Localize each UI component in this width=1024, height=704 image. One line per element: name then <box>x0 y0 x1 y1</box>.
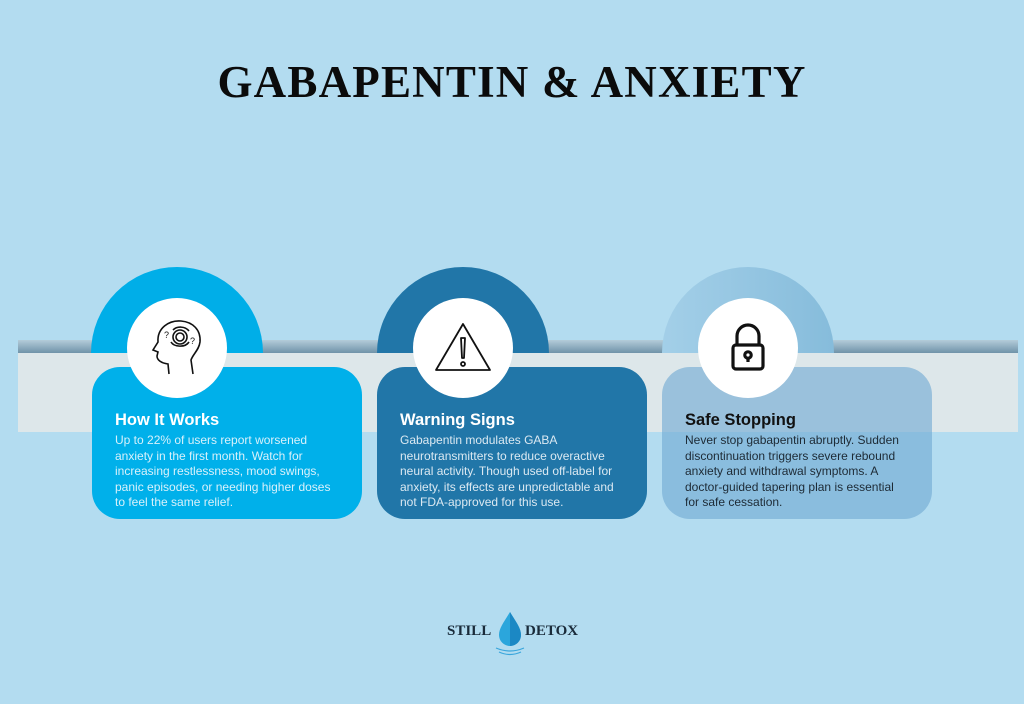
icon: head brain: ? <box>190 336 195 346</box>
panel: how it works <box>92 367 362 519</box>
heading: How It Works <box>115 411 219 429</box>
body text <box>400 433 614 509</box>
body text: anxiety and withdrawal symptoms. A <box>685 464 878 478</box>
body text: to feel the same relief. <box>115 495 233 509</box>
body text: doctor-guided tapering plan is essential <box>685 480 894 494</box>
heading: Safe Stopping <box>685 411 796 429</box>
body text: for safe cessation. <box>685 495 782 509</box>
body text: neurotransmitters to reduce overactive <box>400 448 605 462</box>
band strip <box>18 340 1018 353</box>
body text: Never stop gabapentin abruptly. Sudden <box>685 433 899 447</box>
logo <box>447 612 578 656</box>
body text <box>685 433 899 509</box>
band <box>18 353 1018 432</box>
body text: not FDA-approved for this use. <box>400 495 563 509</box>
body text: Gabapentin modulates GABA <box>400 433 557 447</box>
semicircle 3 <box>662 267 834 353</box>
body text <box>115 433 330 509</box>
logo text still: STILL <box>447 623 491 639</box>
body text: discontinuation triggers severe rebound <box>685 448 895 462</box>
title: GABAPENTIN & ANXIETY <box>217 57 807 107</box>
semicircle 1 <box>91 267 263 353</box>
heading: Warning Signs <box>400 411 515 429</box>
semicircle 2 <box>377 267 549 353</box>
panel: warning signs <box>377 367 647 519</box>
body text: neural activity. Though used off-label for <box>400 464 612 478</box>
body text: Up to 22% of users report worsened <box>115 433 307 447</box>
body text: panic episodes, or needing higher doses <box>115 480 330 494</box>
icon: lock <box>698 298 798 398</box>
icon: head brain: ? <box>164 330 169 340</box>
icon: warning <box>413 298 513 398</box>
body text: anxiety in the first month. Watch for <box>115 448 303 462</box>
panel: safe stopping <box>662 367 932 519</box>
icon: head brain <box>127 298 227 398</box>
body text: anxiety, its effects are unpredictable and <box>400 480 614 494</box>
body text: increasing restlessness, mood swings, <box>115 464 320 478</box>
logo text detox: DETOX <box>525 623 578 639</box>
logo drop <box>496 612 524 656</box>
